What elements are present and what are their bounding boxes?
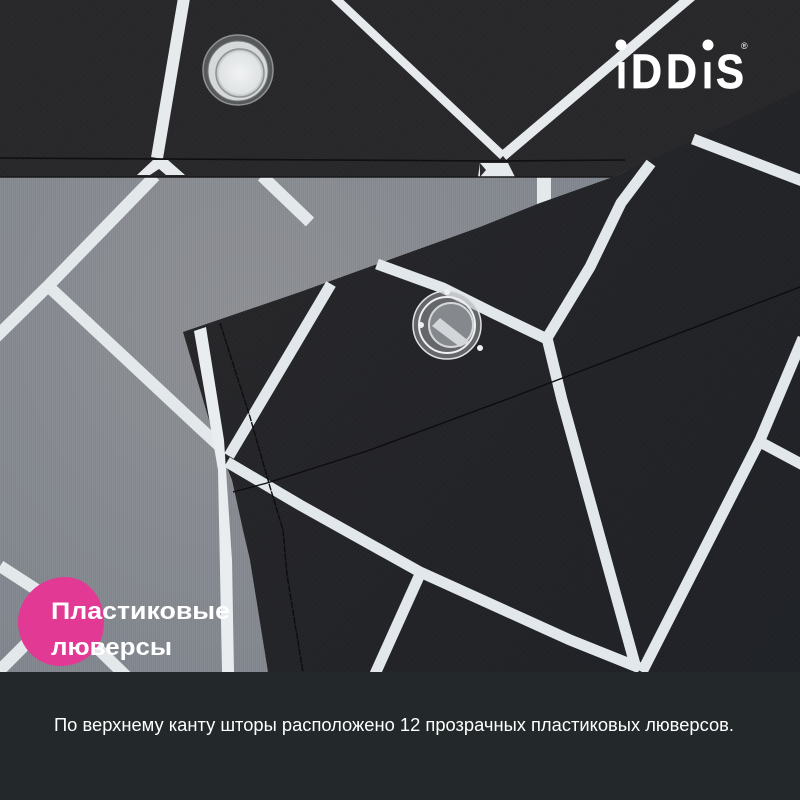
folded black curtain flap	[183, 90, 800, 674]
logo: IDDIS: ®	[741, 41, 748, 51]
logo: IDDIS: S	[716, 45, 744, 99]
logo: IDDIS: ı	[702, 45, 713, 99]
logo: IDDIS: D	[631, 45, 662, 99]
hem stitching	[0, 158, 625, 161]
grommet: top	[203, 35, 273, 105]
pink badge blob	[18, 577, 104, 666]
flap stitching	[220, 287, 800, 672]
caption text: По верхнему канту шторы расположено 12 прозрачных пластиковых люверсов.	[54, 715, 734, 735]
top black curtain band	[0, 0, 800, 177]
grommet: transparent on flap	[413, 289, 483, 359]
logo: IDDIS: ı	[616, 45, 627, 99]
gray curtain background	[0, 170, 640, 680]
logo: IDDIS	[616, 40, 748, 99]
heading: Пластиковые	[51, 598, 230, 625]
heading: люверсы	[51, 634, 172, 661]
bottom caption band	[0, 672, 800, 800]
logo: IDDIS: D	[666, 45, 697, 99]
